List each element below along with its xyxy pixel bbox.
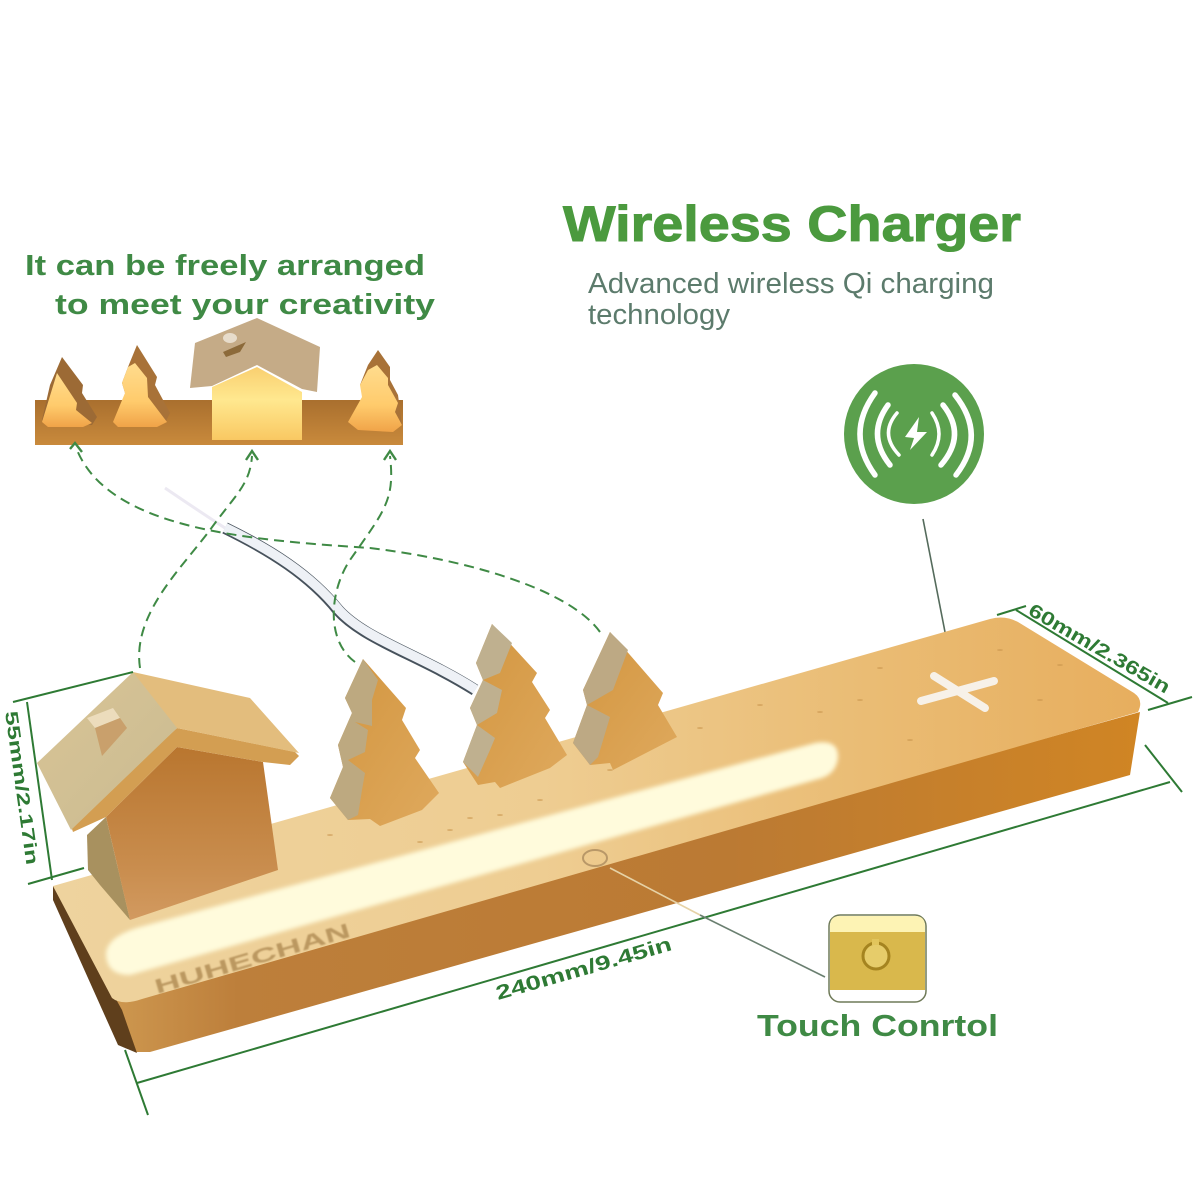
house front: [106, 747, 278, 920]
roof eave: [71, 728, 299, 832]
leader line: charger: [923, 519, 951, 668]
dimension: height 55mm: [1, 672, 133, 884]
base front face: [114, 712, 1140, 1052]
wooden strip: [35, 400, 403, 445]
light bar: [106, 742, 838, 975]
lit tree right: [348, 350, 402, 432]
touch control label: Touch Conrtol: [757, 1008, 998, 1043]
roof front slope: [37, 672, 180, 830]
panel: wooden base: [53, 618, 1140, 1053]
caption line 2: to meet your creativity: [55, 289, 435, 321]
wood grain dots: [327, 649, 1063, 843]
title: Wireless Charger: [563, 196, 1021, 252]
dashed arrow: far tree to scene: [77, 450, 600, 632]
lit house: [190, 318, 320, 440]
charging cross: [921, 676, 994, 708]
base left face: [53, 886, 137, 1053]
icon: touch control close-up: [829, 915, 926, 1002]
depth label: 60mm/2.365in: [1024, 600, 1174, 698]
roof back slope: [133, 672, 299, 753]
tree 2: [463, 624, 567, 788]
house: [37, 672, 299, 920]
cable: [165, 488, 476, 690]
touch symbol: [583, 850, 607, 866]
tree 3: [573, 632, 677, 770]
subtitle line 1: Advanced wireless Qi charging: [588, 268, 994, 300]
panel: arrangement caption: [25, 250, 435, 321]
dashed arrow: house to scene: [139, 456, 252, 668]
arrowheads: [70, 443, 396, 460]
house side: [87, 817, 130, 920]
panel: small lit scene: [35, 318, 403, 445]
caption line 1: It can be freely arranged: [25, 250, 425, 282]
length label: 240mm/9.45in: [493, 933, 674, 1005]
base top surface: [53, 618, 1140, 1002]
subtitle line 2: technology: [588, 299, 731, 331]
dimension: depth 60mm: [997, 600, 1192, 710]
leader line: touch control: [610, 868, 825, 977]
lit tree left: [42, 357, 97, 427]
engraved brand: HUHECHAN: [152, 920, 353, 999]
lit tree middle: [113, 345, 170, 427]
subtitle: [588, 268, 994, 331]
height label: 55mm/2.17in: [1, 710, 42, 866]
icon: wireless charging badge: [844, 364, 984, 504]
dashed arrow: tree to scene: [334, 456, 391, 662]
dimension: length 240mm: [125, 745, 1182, 1115]
tree 1: [330, 659, 439, 826]
chimney: [87, 708, 127, 756]
